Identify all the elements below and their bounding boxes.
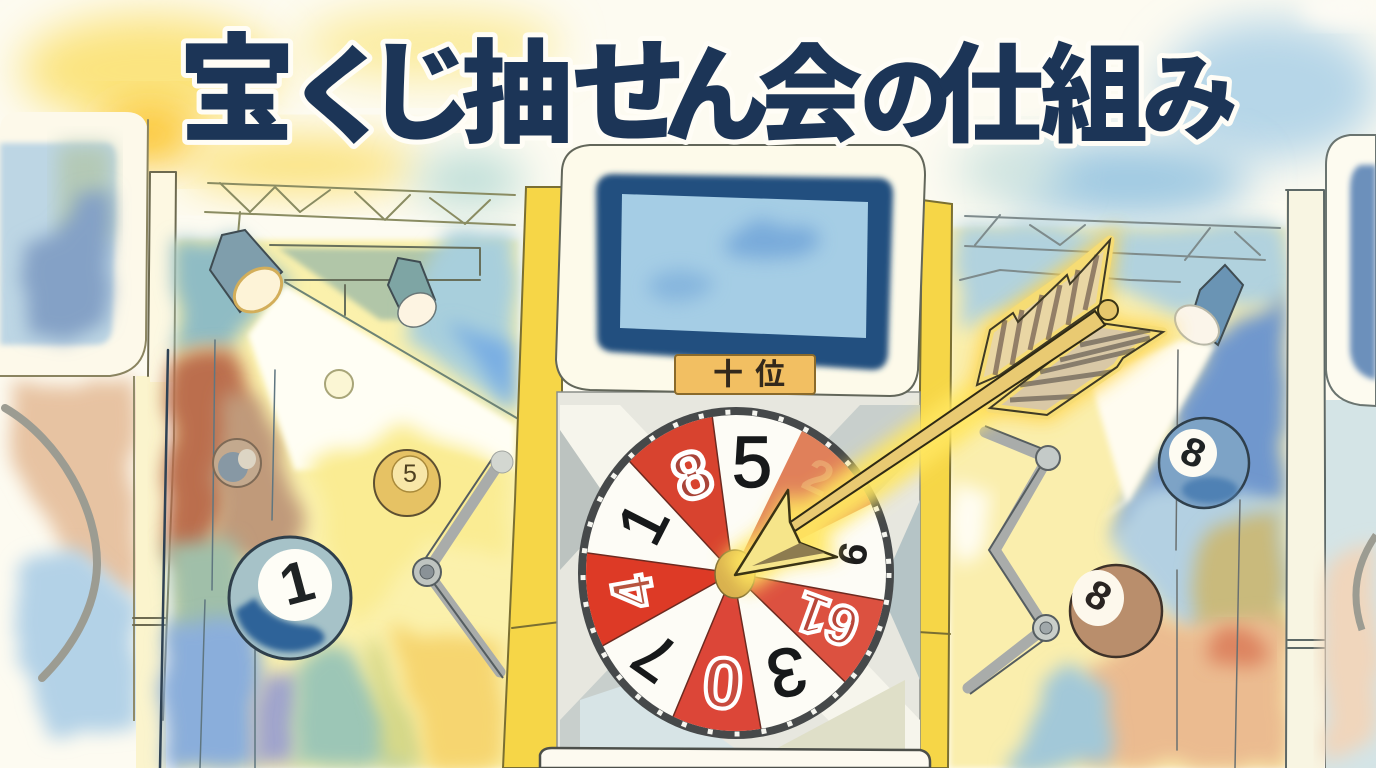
panel: yellow side pillars: [503, 187, 952, 768]
ball: blue number 8: [1159, 418, 1249, 508]
arrow nock: [1098, 300, 1118, 320]
arrow shaft: [789, 311, 1105, 531]
wheel: [578, 407, 894, 739]
title: じ: [366, 6, 475, 163]
background: watercolor washes: [20, 0, 1376, 220]
label: digit position: 十: [713, 358, 743, 392]
arrow head: [735, 490, 837, 575]
wheel sectors: [586, 416, 884, 731]
ball: brown number 8: [1070, 565, 1162, 657]
arrow: golden arrow: [735, 240, 1163, 575]
wheel numbers: 1: [603, 491, 683, 555]
title: ん: [663, 9, 770, 164]
panel: right stage: [950, 190, 1326, 768]
wheel numbers: 7: [620, 617, 690, 697]
wheel numbers: 4: [598, 570, 668, 614]
ball: blue number 8: 8: [1174, 428, 1212, 478]
panel: machine body with diamond pattern: [557, 392, 920, 752]
title: 仕: [936, 9, 1044, 165]
label: digit position: [675, 355, 815, 394]
title: ん: [663, 9, 770, 164]
title: く: [287, 10, 394, 165]
wheel numbers: 5: [732, 423, 772, 503]
title: 会: [757, 10, 863, 164]
title: 宝: [178, 0, 296, 166]
arm: left mechanical arm: [413, 451, 513, 678]
wheel numbers: 0: [700, 642, 746, 726]
panel: left cabinet and floor: [0, 112, 176, 768]
ball: brown number 8: 8: [1077, 571, 1119, 621]
title: せ: [571, 0, 687, 167]
wheel numbers: 3: [761, 631, 813, 713]
title: 組: [1040, 9, 1148, 165]
title: [178, 0, 1238, 167]
truss: left: [205, 183, 515, 235]
title: 会: [757, 10, 863, 164]
icon: spotlight small: [388, 258, 442, 334]
ball: number 5: 5: [403, 460, 417, 488]
title: み: [1142, 21, 1238, 160]
wheel hub: [715, 550, 755, 598]
icon: small gray ball: [213, 439, 261, 487]
ball: number 1: 1: [273, 547, 321, 619]
floor ring: [5, 408, 97, 678]
screen frame: [596, 174, 893, 370]
wheel numbers: 2: [795, 448, 841, 508]
title: く: [287, 10, 394, 165]
ball: number 1: [229, 537, 351, 659]
title: の: [860, 26, 952, 159]
arm: right mechanical arm: [968, 426, 1060, 694]
wheel numbers: [598, 423, 876, 726]
arrow fletching upper: [977, 240, 1110, 385]
title: の: [860, 26, 952, 159]
wheel numbers: 8: [662, 434, 722, 516]
floor ring right: [1356, 535, 1376, 630]
icon: spotlight right: [1168, 265, 1243, 353]
title: 抽: [461, 4, 573, 166]
title: 抽: [461, 4, 573, 166]
ball: number 5: [374, 450, 440, 516]
arrow fletching lower: [990, 323, 1163, 415]
screen wash: [645, 220, 820, 299]
icon: spotlight left: [210, 230, 290, 321]
truss: right: [960, 215, 1280, 282]
wheel numbers: 9: [828, 539, 876, 569]
title: み: [1142, 21, 1238, 160]
panel: screen housing: [556, 145, 925, 396]
arrow glow: [735, 240, 1163, 575]
title: 組: [1040, 9, 1148, 165]
wheel numbers: 61: [787, 580, 867, 660]
panel: right cabinet: [1326, 135, 1376, 768]
title: せ: [571, 0, 687, 167]
label: digit position: 位: [755, 358, 785, 392]
icon: outline ring: [325, 370, 353, 398]
screen display: [620, 194, 868, 338]
title: じ: [366, 6, 475, 163]
bottom machine part: [540, 748, 930, 768]
panel: left stage: [160, 183, 520, 768]
title: 宝: [178, 0, 296, 166]
title: 仕: [936, 9, 1044, 165]
